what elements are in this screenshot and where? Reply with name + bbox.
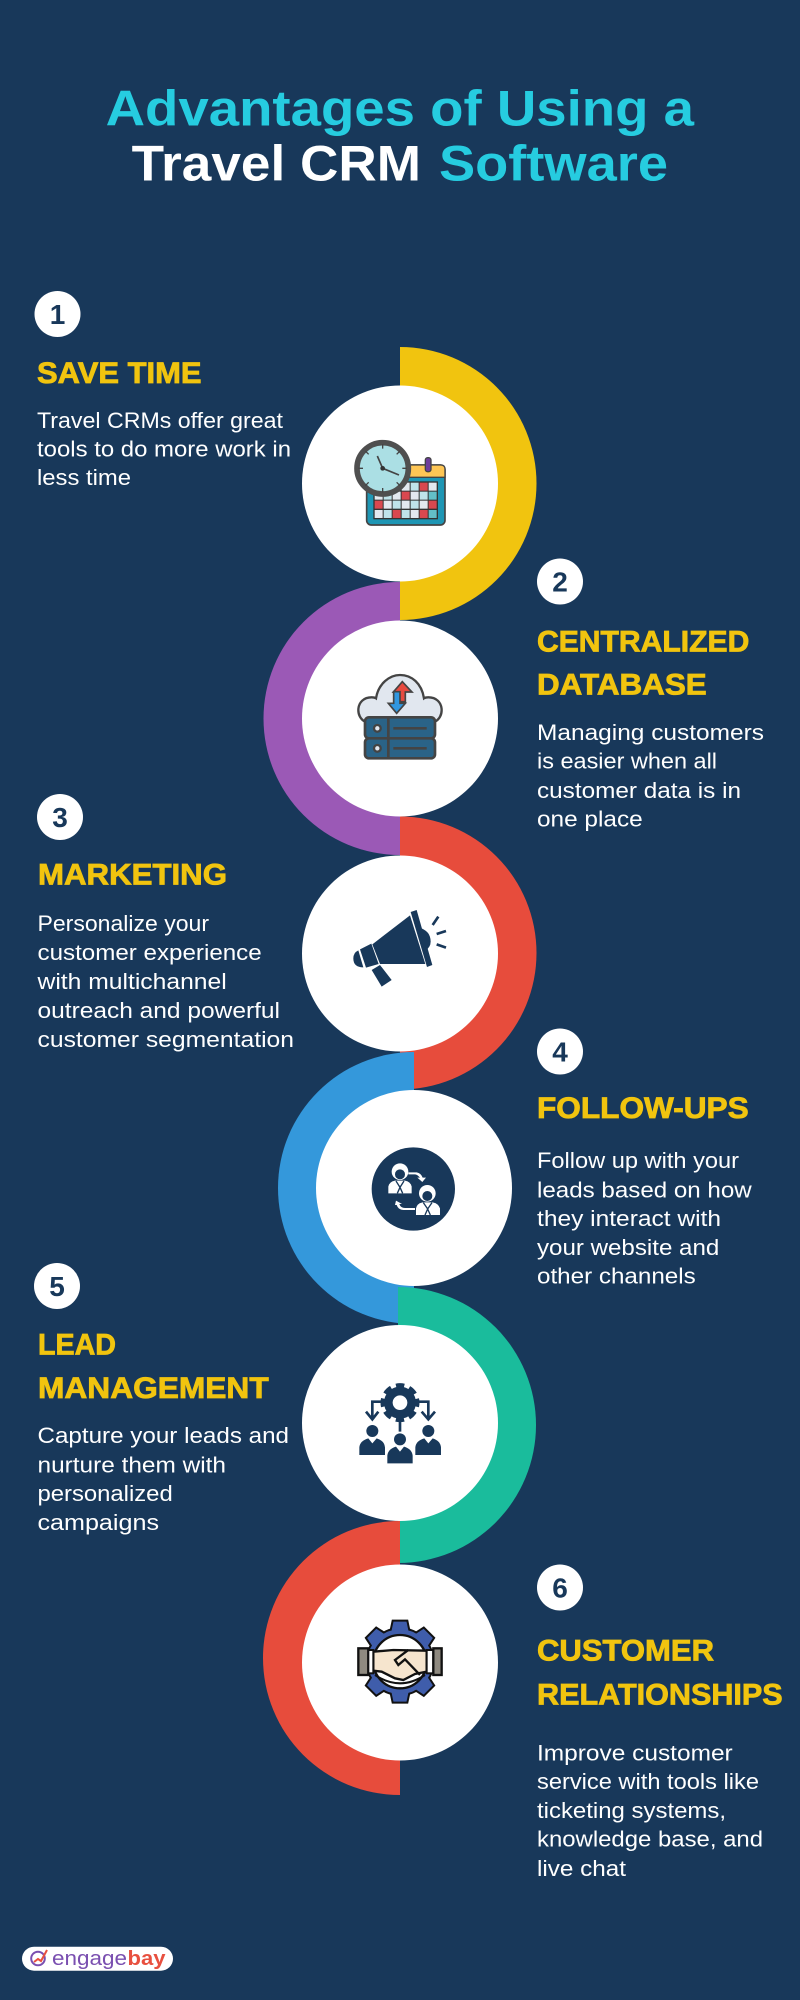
text: centralized database description: one place	[537, 806, 643, 831]
text: customer relationships description	[537, 1740, 763, 1881]
panel: step 4 follow-ups	[278, 1028, 752, 1324]
logo: engagebay	[22, 1947, 173, 1971]
green half ring	[398, 1287, 536, 1563]
white circle 6	[302, 1564, 498, 1760]
text: marketing description	[36, 911, 294, 1052]
icon: two people with arrows	[372, 1147, 455, 1231]
icon: cloud database	[358, 675, 442, 758]
text: customer relationships description: Improve customer	[537, 1740, 733, 1766]
number badge 5	[34, 1263, 80, 1309]
text: lead management description: personalized	[38, 1481, 173, 1506]
white circle 2	[302, 620, 498, 816]
purple half ring	[264, 582, 400, 855]
text: save time description: Travel CRMs offer great	[37, 408, 283, 433]
text: marketing description: customer segmentation	[38, 1027, 294, 1052]
heading: customer relationships: CUSTOMER	[537, 1635, 714, 1668]
icon: gear and three people	[359, 1385, 441, 1463]
icon: handshake in gear	[358, 1621, 442, 1703]
number badge 3: 3	[52, 802, 68, 833]
number badge 4	[537, 1028, 583, 1074]
text: save time description: tools to do more work in	[37, 437, 291, 462]
text: lead management description	[38, 1423, 289, 1535]
text: follow-ups description: other channels	[537, 1264, 696, 1288]
title: Advantages of Using a	[106, 80, 695, 136]
blue half ring	[278, 1052, 414, 1324]
number badge 5: 5	[49, 1271, 65, 1302]
white circle 3	[302, 856, 498, 1052]
yellow half ring	[400, 347, 536, 620]
panel: step 5 lead management	[34, 1263, 536, 1563]
text: centralized database description: customer data is in	[537, 778, 741, 803]
panel: step 2 centralized database	[264, 558, 764, 855]
heading: centralized database: CENTRALIZED	[537, 626, 749, 659]
logo: engagebay: bay	[128, 1948, 166, 1970]
heading: centralized database: DATABASE	[537, 669, 707, 702]
text: centralized database description	[537, 720, 764, 831]
heading: save time: SAVE TIME	[37, 357, 202, 390]
text: follow-ups description: leads based on how	[537, 1177, 752, 1202]
white circle 1	[302, 386, 498, 582]
text: follow-ups description	[537, 1148, 752, 1288]
title: Travel CRM	[132, 136, 421, 192]
text: follow-ups description: they interact with	[537, 1206, 721, 1231]
text: lead management description: nurture them with	[38, 1452, 226, 1477]
heading: marketing: MARKETING	[38, 858, 227, 892]
text: marketing description: with multichannel	[36, 969, 227, 994]
text: customer relationships description: knowledge base, and	[537, 1827, 763, 1852]
number badge 3	[37, 794, 83, 840]
red half ring	[263, 1521, 400, 1795]
heading: lead management: LEAD	[38, 1328, 116, 1362]
text: save time description	[37, 408, 291, 490]
panel: step 1 save time	[34, 291, 536, 620]
white circle 5	[302, 1325, 498, 1521]
panel: step 6 customer relationships	[263, 1521, 783, 1881]
heading: lead management	[38, 1328, 269, 1405]
text: marketing description: customer experience	[38, 940, 262, 965]
text: customer relationships description: ticketing systems,	[537, 1798, 726, 1823]
number badge 1: 1	[50, 299, 65, 330]
title	[106, 80, 695, 192]
text: marketing description: Personalize your	[38, 911, 209, 936]
number badge 1	[34, 291, 80, 337]
text: centralized database description: Managing customers	[537, 720, 764, 745]
icon: clock and calendar	[357, 443, 445, 525]
panel: step 3 marketing	[36, 794, 536, 1090]
number badge 2	[537, 558, 583, 604]
number badge 6	[537, 1564, 583, 1610]
heading: centralized database	[537, 626, 749, 702]
text: centralized database description: is easier when all	[537, 749, 717, 774]
text: customer relationships description: live chat	[537, 1856, 626, 1881]
logo: engagebay: engage	[52, 1948, 127, 1970]
heading: follow-ups: FOLLOW-UPS	[537, 1092, 749, 1125]
number badge 6: 6	[552, 1572, 568, 1604]
text: follow-ups description: your website and	[537, 1235, 719, 1260]
heading: customer relationships: RELATIONSHIPS	[537, 1679, 783, 1712]
red half ring	[400, 816, 536, 1090]
text: follow-ups description: Follow up with your	[537, 1148, 739, 1173]
white circle 4	[316, 1090, 512, 1286]
text: marketing description: outreach and powerful	[38, 998, 280, 1023]
heading: customer relationships	[537, 1635, 783, 1712]
text: customer relationships description: service with tools like	[537, 1769, 759, 1794]
number badge 2: 2	[552, 566, 568, 598]
text: lead management description: campaigns	[38, 1510, 159, 1535]
icon: megaphone	[353, 910, 446, 987]
text: lead management description: Capture your leads and	[38, 1423, 289, 1448]
number badge 4: 4	[552, 1036, 568, 1068]
title: Software	[439, 136, 668, 192]
text: save time description: less time	[37, 465, 131, 490]
heading: lead management: MANAGEMENT	[38, 1372, 269, 1405]
